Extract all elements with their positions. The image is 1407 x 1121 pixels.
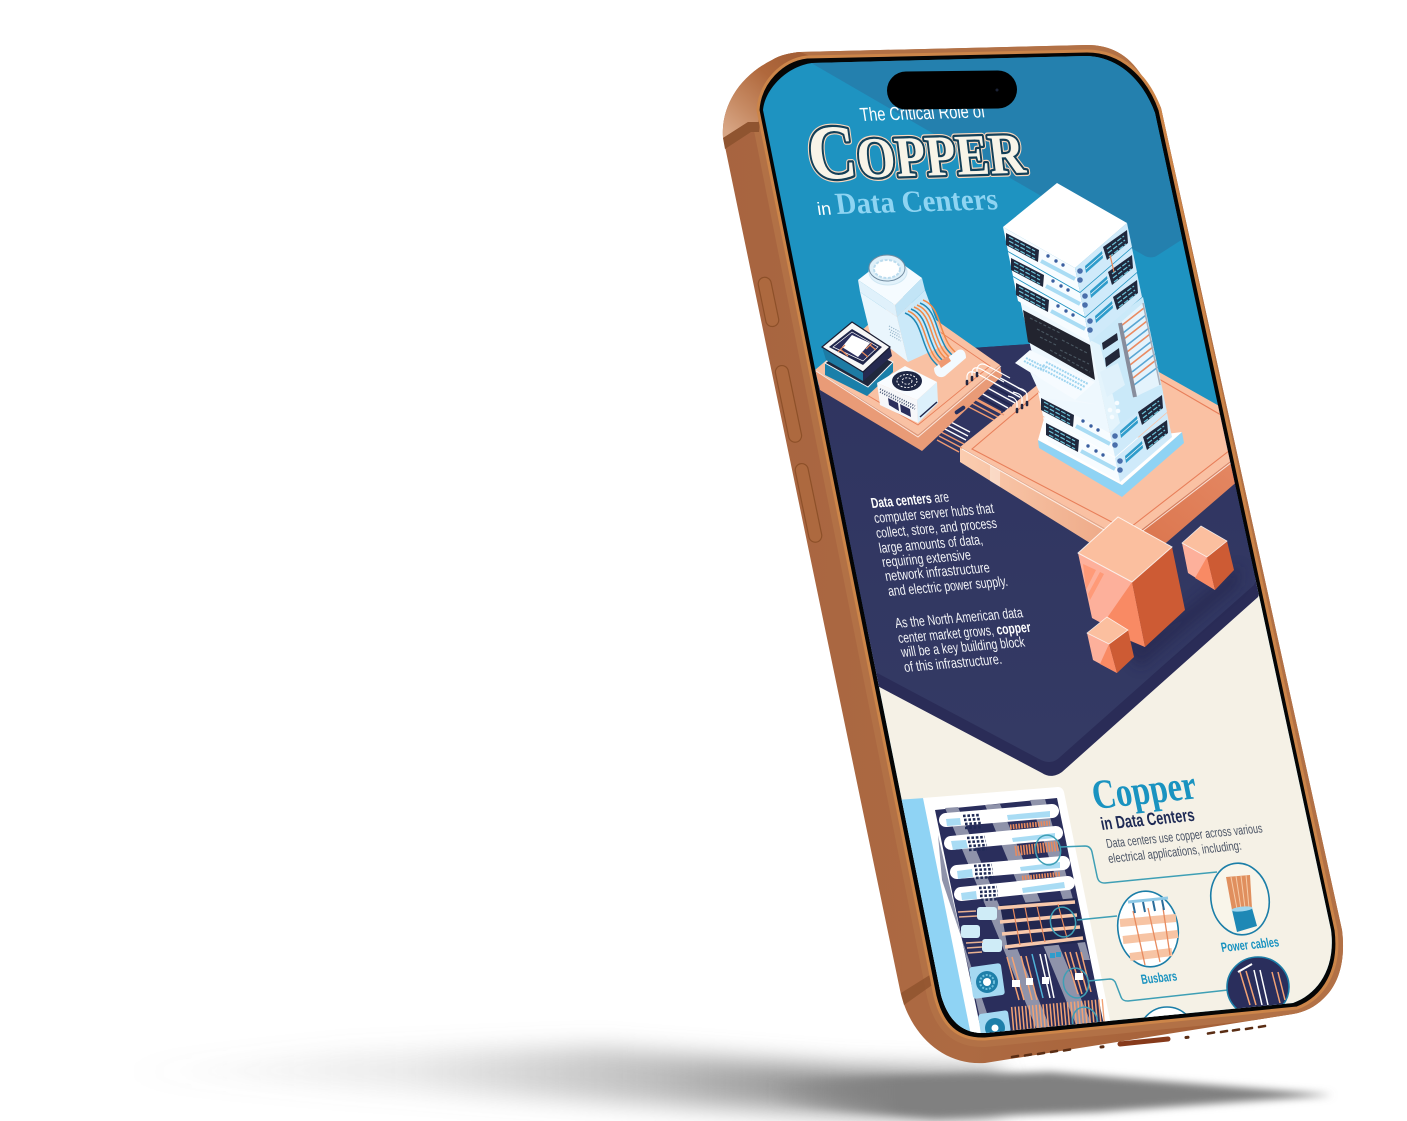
antenna band <box>901 973 935 1005</box>
title: copper: COPPER <box>803 104 1030 196</box>
dark blue diagonal band <box>812 56 1182 258</box>
lighter inner bevel <box>758 51 1337 1039</box>
monitor <box>1023 310 1095 380</box>
keyboard <box>1015 350 1038 376</box>
callout circles and leader lines <box>1033 833 1228 1039</box>
top-left chamfer <box>723 52 810 138</box>
cable rack <box>1120 303 1160 397</box>
copper cube small <box>1087 617 1134 673</box>
left platform <box>815 296 1027 451</box>
icon: power cables <box>1205 859 1275 939</box>
circuit board stack <box>822 322 893 396</box>
gray diagonals <box>938 799 1092 1040</box>
heading: in data centers: in Data Centers <box>1099 805 1196 834</box>
phone body <box>723 45 1343 1063</box>
intro text block: requiring extensive <box>881 548 972 571</box>
blue background <box>763 56 1332 1033</box>
copper text block: of this infrastructure. <box>903 652 1003 676</box>
icon: switchgear <box>1227 957 1289 1017</box>
label: busbars: Busbars <box>1140 969 1178 987</box>
copper text block: As the North American data <box>894 605 1025 632</box>
title: copper: COPPER <box>803 104 1030 196</box>
icon: busbars <box>1112 886 1184 972</box>
displays <box>1102 333 1118 350</box>
title: copper <box>808 124 1030 182</box>
server bar details <box>946 811 1065 900</box>
right platform <box>960 372 1235 546</box>
intro text block: large amounts of data, <box>878 532 984 557</box>
wire connector <box>934 349 966 377</box>
title: in data centers <box>817 191 998 215</box>
speaker grille and port <box>1012 1026 1265 1057</box>
title: the critical role of: The Critical Role of <box>859 101 987 126</box>
screen bezel <box>758 51 1337 1039</box>
cream lower section <box>868 576 1332 1033</box>
intro text block: collect, store, and process <box>875 516 998 542</box>
control buttons <box>1108 401 1120 419</box>
intro text block: Data centers are <box>870 490 950 512</box>
volume up button <box>774 364 803 443</box>
server tower <box>1003 183 1184 497</box>
side buttons <box>757 276 823 543</box>
server bars <box>946 811 1068 894</box>
title: in data centers: Data Centers <box>833 181 1000 221</box>
intro text block: computer server hubs that <box>873 501 995 527</box>
copper text block <box>896 608 1030 672</box>
heading: copper: Copper <box>1088 763 1200 819</box>
connecting wire bundles <box>937 375 1026 452</box>
cable hooks <box>967 364 1027 412</box>
intro text block <box>870 490 1009 600</box>
lower servers <box>1043 413 1172 482</box>
copper cube large <box>1078 517 1185 647</box>
ground shadow <box>108 1047 1333 1118</box>
cube shadows <box>1132 576 1236 662</box>
tower main body <box>1020 300 1110 433</box>
dark rack <box>935 798 1105 1040</box>
white card <box>923 787 1112 1040</box>
copper hatch <box>1012 1012 1104 1020</box>
intro text block: and electric power supply. <box>887 574 1009 600</box>
panel: rack diagram <box>895 787 1112 1044</box>
cable harness <box>1007 952 1091 1000</box>
copper cube right <box>1182 526 1234 590</box>
description text: electrical applications, including: <box>1107 838 1243 866</box>
copper and blue coolant wires <box>905 300 956 366</box>
upper servers <box>1013 273 1142 342</box>
copper text block: will be a key building block <box>899 635 1027 661</box>
volume down button <box>794 462 823 543</box>
busbar grid <box>958 898 1086 953</box>
copper text block: center market grows, copper <box>897 620 1033 647</box>
rack top <box>1003 183 1127 268</box>
cooling unit <box>858 255 966 377</box>
title: copper: COPPER <box>803 104 1030 196</box>
screen content <box>763 56 1332 1033</box>
navy floor <box>818 344 1259 776</box>
power supply unit <box>877 366 938 423</box>
fans <box>969 963 1012 1044</box>
action button <box>757 276 780 328</box>
tower base plate <box>1038 432 1184 497</box>
label: power cables: Power cables <box>1220 934 1280 955</box>
chamfer band <box>723 122 760 149</box>
dynamic island <box>887 70 1017 110</box>
description text <box>1105 821 1264 866</box>
description text: Data centers use copper across various <box>1105 821 1264 851</box>
grille dots <box>889 326 901 341</box>
icon: partially visible circle <box>1139 1007 1195 1063</box>
light blue strip <box>902 798 973 1032</box>
title: in data centers: in <box>816 199 833 219</box>
intro text block: network infrastructure <box>884 560 991 585</box>
